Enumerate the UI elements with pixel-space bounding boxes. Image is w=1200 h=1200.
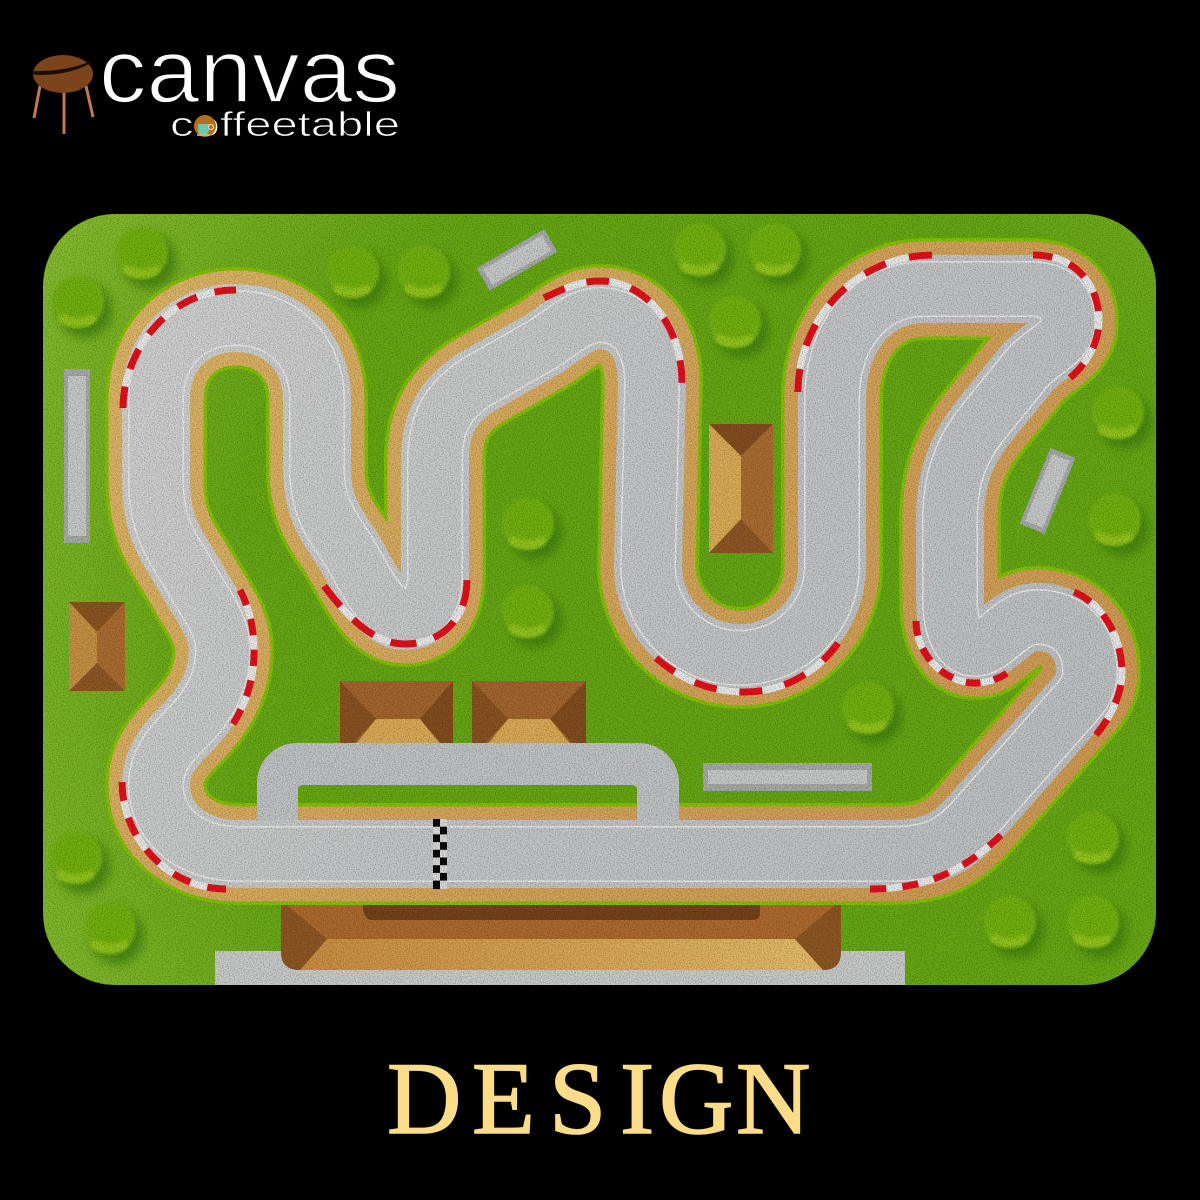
concrete apron	[215, 951, 905, 985]
logo word: coffeetable: coffeetable	[170, 106, 400, 144]
curb: inner hairpin left	[324, 580, 467, 644]
building: centre roof	[709, 424, 773, 553]
curb: lower hairpin	[916, 621, 1007, 683]
tree	[842, 682, 902, 744]
barrier: infield horizontal	[703, 763, 872, 791]
tree	[709, 296, 769, 358]
grass surface	[43, 214, 1156, 985]
tree	[674, 224, 734, 286]
logo word: canvas: canvas	[99, 22, 400, 122]
grandstand	[281, 900, 841, 970]
pit lane	[257, 743, 679, 822]
chequered start finish line	[433, 819, 447, 889]
track with verge, gravel and asphalt	[156, 289, 1090, 854]
curb: top left	[123, 290, 236, 408]
red and white curbs	[122, 255, 1122, 889]
tree	[749, 224, 809, 286]
icon: coffee cup	[194, 115, 216, 137]
curb: S bend	[233, 590, 254, 724]
building: paddock roof left	[340, 681, 453, 743]
building: left roof	[69, 602, 125, 691]
curb: top middle	[544, 281, 682, 383]
barrier: top	[477, 229, 557, 291]
tree	[502, 586, 562, 648]
curb: top right second	[1033, 255, 1099, 378]
curb: top right first	[798, 255, 932, 392]
curb: bottom right	[870, 835, 1001, 889]
tree	[52, 276, 112, 338]
tree	[502, 498, 562, 560]
tree	[1067, 896, 1127, 958]
trees	[50, 224, 1152, 964]
tree	[398, 246, 458, 308]
curb: U bottom	[656, 643, 838, 692]
tree	[1092, 387, 1152, 449]
curb: right side	[1074, 592, 1122, 735]
title: design: DESIGN	[387, 1042, 810, 1156]
panel: racetrack table top	[43, 214, 1156, 985]
barrier: right	[1020, 448, 1075, 534]
tree	[984, 896, 1044, 958]
surface grain texture	[43, 214, 1156, 985]
tree	[1067, 812, 1127, 874]
curb: bottom left	[122, 782, 226, 889]
tree	[1089, 494, 1149, 556]
tree	[116, 227, 176, 289]
icon: coffee bean table	[33, 55, 93, 134]
barrier: left	[64, 369, 90, 543]
tree	[327, 246, 387, 308]
building: paddock roof right	[472, 681, 586, 743]
logo: canvas coffeetable	[33, 22, 400, 144]
tree	[84, 902, 144, 964]
tree	[50, 832, 110, 894]
